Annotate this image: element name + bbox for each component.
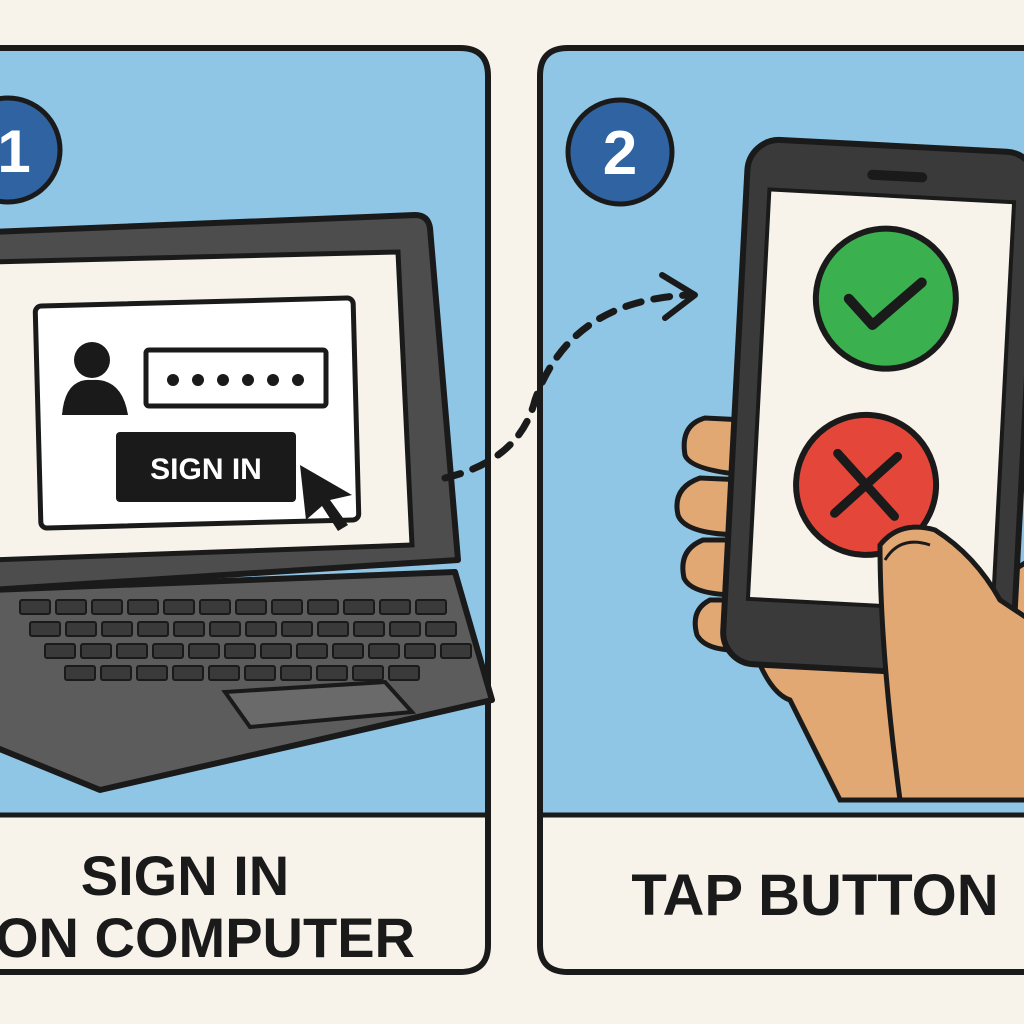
sign in button <box>116 432 296 502</box>
panel: sign in on computer <box>0 48 492 972</box>
caption: sign in on computer: SIGN IN <box>81 844 289 907</box>
sign in button: SIGN IN <box>150 453 262 486</box>
fingers <box>677 418 745 650</box>
caption: sign in on computer: ON COMPUTER <box>0 906 415 969</box>
laptop <box>0 215 492 790</box>
panel: tap button <box>540 48 1024 972</box>
arrow: dashed to phone <box>445 275 695 478</box>
phone <box>722 138 1024 678</box>
icon: cursor <box>300 465 352 531</box>
step badge 1 <box>0 98 60 202</box>
caption: tap button: TAP BUTTON <box>631 863 999 928</box>
keyboard <box>20 600 471 680</box>
thumb <box>880 527 1024 800</box>
icon: green check <box>812 225 959 372</box>
hand palm <box>740 560 1024 800</box>
login box <box>35 298 359 531</box>
step badge 2 <box>568 100 672 204</box>
icon: red cross <box>793 411 940 558</box>
step badge 2: 2 <box>603 119 637 188</box>
caption: sign in on computer <box>0 844 415 969</box>
